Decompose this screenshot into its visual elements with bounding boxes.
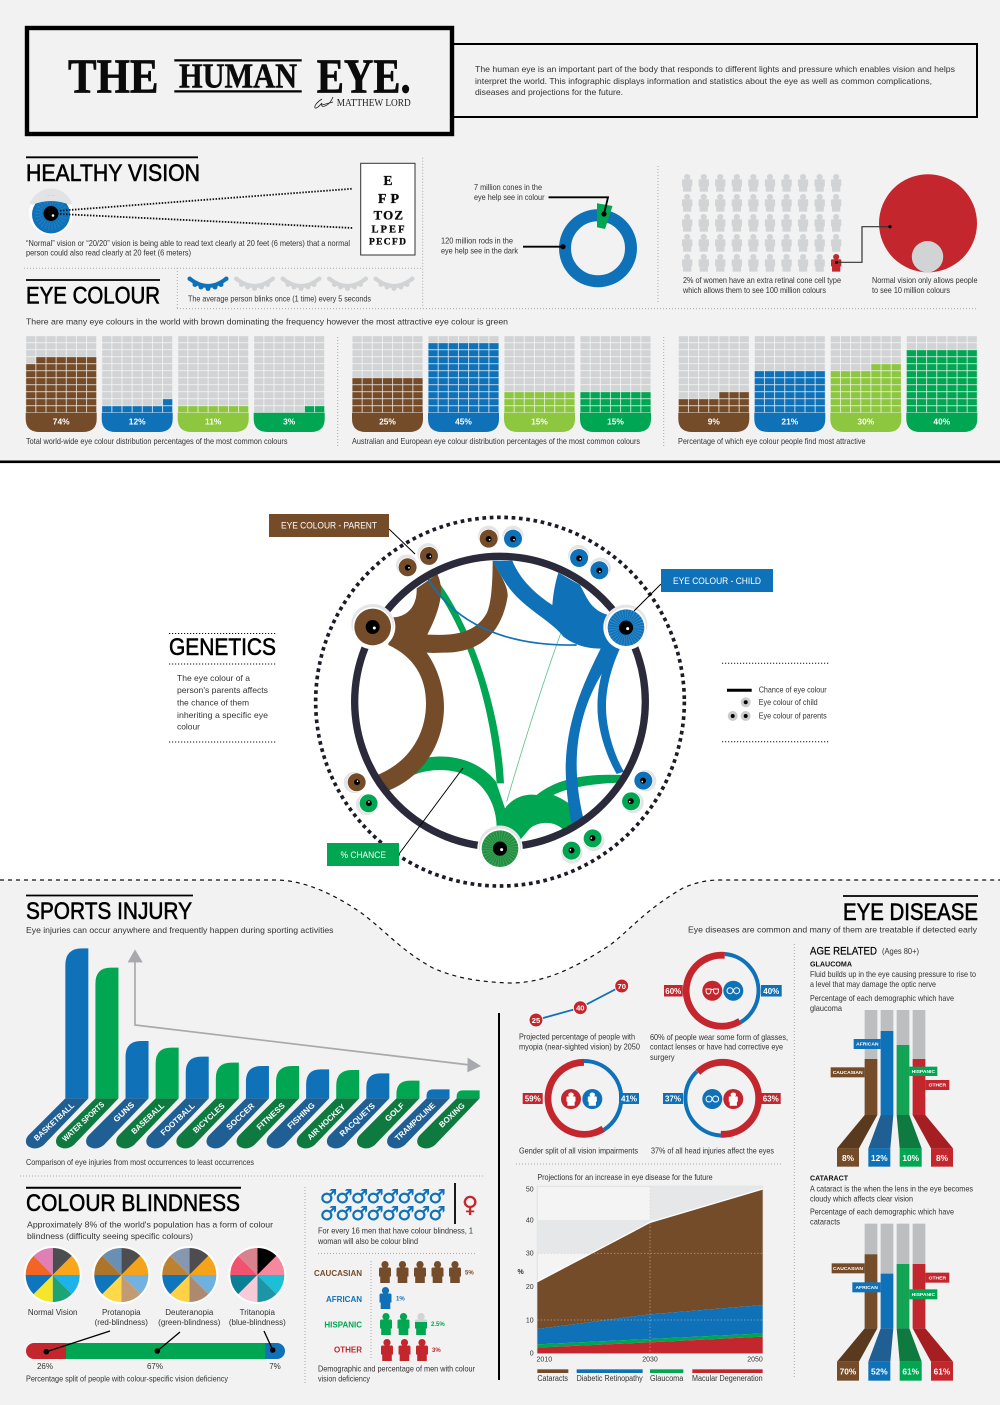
pictogram: demographic: AFRICAN (326, 1295, 362, 1304)
funnel chart: cataract: OTHER (929, 1275, 946, 1281)
waffle group: world-wide distribution: 11% (205, 417, 222, 427)
split bar: deficiency: Percentage split of people with colour-specific vision deficiency (26, 1374, 229, 1384)
bar chart: sports injuries: FOOTBALL (159, 1101, 197, 1137)
chart legend: Macular Degeneration (692, 1374, 763, 1383)
callout: parent: EYE COLOUR - PARENT (281, 520, 377, 530)
ring: corrective eyewear: 60% (665, 987, 681, 996)
ring: gender split (519, 1049, 639, 1156)
ring chart: rods and cones (441, 182, 631, 281)
funnel chart: glaucoma: OTHER (929, 1083, 946, 1089)
axis labels: 20 (526, 1284, 534, 1291)
ring: gender split: 59% (525, 1094, 541, 1104)
legend: Eye colour of parents (759, 710, 827, 720)
text: age related, glaucoma: AGE RELATED (810, 945, 877, 957)
pie labels: Protanopia (102, 1308, 141, 1317)
funnel chart: glaucoma: 10% (902, 1153, 920, 1163)
waffle group: most attractive: 21% (781, 417, 799, 427)
pictogram: demographic: 1% (396, 1296, 405, 1302)
bar chart: sports injuries: TRAMPOLINE (393, 1101, 438, 1143)
area chart: disease projection (518, 1173, 763, 1383)
text: eye colour intro: There are many eye colours in the world with brown dominating the frequency however the most attractive eye colour is green (26, 316, 508, 326)
pie labels: (green-blindness) (158, 1318, 221, 1327)
funnel chart: cataract: AFRICAN (855, 1285, 878, 1291)
axis labels: 2010 (537, 1357, 552, 1364)
bar chart: sports injuries: BOXING (437, 1101, 467, 1129)
split bar: deficiency: 67% (147, 1362, 163, 1371)
callout: child: EYE COLOUR - CHILD (673, 576, 761, 586)
funnel chart: cataract: 61% (902, 1367, 920, 1377)
text: normal vision: “Normal” vision or “20/20” vision is being able to read text clearly at 20 feet (6 meters) that a normal (26, 238, 350, 248)
pictogram: demographic: HISPANIC (324, 1320, 362, 1330)
icons: male to female ratio (320, 1183, 478, 1225)
text: cataract: A cataract is the when the lens in the eye becomes (810, 1184, 973, 1194)
eye chart: TOZ (374, 207, 403, 222)
axis labels: 40 (526, 1217, 534, 1224)
area: cataracts (537, 1189, 763, 1329)
byline: MATTHEW LORD (337, 97, 411, 109)
large eye: parent brown (350, 604, 395, 649)
chart legend (537, 1369, 763, 1383)
text: retinal cone: 2% of women have an extra retinal cone cell type (683, 275, 841, 285)
pie labels: Tritanopia (240, 1308, 275, 1317)
title box (27, 28, 452, 134)
bar chart: sports injuries (26, 948, 481, 1148)
ring: corrective eyewear: surgery (650, 1052, 675, 1062)
waffle group: most attractive: 30% (857, 417, 875, 427)
pictogram: demographic: CAUCASIAN (314, 1269, 362, 1278)
funnel chart: glaucoma: CAUCASIAN (833, 1070, 863, 1076)
bar chart: sports injuries: AIR HOCKEY (306, 1102, 348, 1142)
funnel chart: cataract: HISPANIC (912, 1292, 935, 1298)
large eye: green (477, 826, 523, 871)
text: sports intro: Eye injuries can occur anywhere and frequently happen during sporting activities (26, 925, 334, 935)
line chart: myopia projection (519, 979, 640, 1052)
text: ratio (317, 1226, 473, 1246)
text: age related, glaucoma: Percentage of each demographic which have (810, 993, 954, 1003)
area: diabetic retinopathy (537, 1305, 763, 1344)
ring: corrective eyewear: 60% of people wear some form of glasses, (650, 1032, 788, 1042)
icon: blue eye (29, 189, 73, 235)
legend (722, 663, 830, 742)
waffle group: most attractive: Percentage of which eye colour people find most attractive (678, 436, 866, 446)
funnel chart: cataract: CAUCASIAN (833, 1266, 863, 1272)
callout: chance (327, 768, 463, 866)
axis labels: 0 (530, 1351, 534, 1358)
ring chart: rods and cones: eye help see in colour (474, 192, 545, 202)
eye chart: FP (378, 192, 399, 207)
heading: Genetics: GENETICS (169, 634, 276, 661)
bar chart: sports injuries: WATER SPORTS (61, 1100, 107, 1143)
waffle group: Australian and European: 25% (379, 417, 396, 427)
genetics text panel: The eye colour of a (177, 673, 250, 683)
pie labels: Normal Vision (28, 1308, 78, 1317)
line chart: myopia projection: 70 (617, 982, 626, 991)
bar chart: sports injuries: FITNESS (255, 1101, 287, 1132)
ring: head injuries (651, 1047, 781, 1156)
funnel chart: glaucoma (831, 1010, 953, 1167)
callout: child (634, 569, 773, 611)
blinks row: The average person blinks once (1 time) every 5 seconds (188, 294, 371, 304)
intro box: The human eye is an important part of the body that responds to different lights and pressure which enables vision and helps (475, 64, 955, 74)
heading: Colour Blindness: COLOUR BLINDNESS (26, 1190, 240, 1217)
sight lines (60, 189, 353, 228)
blinks row (188, 276, 414, 304)
pictogram: demographic (314, 1261, 475, 1384)
line chart: myopia projection: myopia (near-sighted vision) by 2050 (519, 1042, 640, 1052)
waffle group: most attractive (678, 336, 977, 446)
waffle group: Australian and European (352, 336, 651, 446)
text: age related, glaucoma: GLAUCOMA (810, 959, 852, 968)
chart legend: Cataracts (537, 1374, 568, 1383)
genetics text panel: inheriting a specific eye (177, 710, 268, 720)
byline (315, 97, 411, 109)
flows: brown (377, 560, 508, 791)
funnel chart: cataract: 61% (934, 1367, 951, 1377)
area: macular degeneration (537, 1337, 763, 1353)
waffle group: Australian and European: 45% (455, 417, 472, 427)
ring: corrective eyewear (650, 942, 788, 1062)
large eye: child blue (603, 605, 649, 650)
bottom section background (0, 880, 1000, 1405)
text: colour blindness intro: blindness (difficulty seeing specific colours) (27, 1231, 193, 1241)
callout: parent (269, 514, 415, 554)
heading: Sports Injury: SPORTS INJURY (26, 898, 192, 925)
text: normal vision: person could also read clearly at 20 feet (6 meters) (26, 248, 191, 258)
pictogram: demographic: 3% (432, 1348, 441, 1354)
funnel chart: glaucoma: HISPANIC (912, 1069, 935, 1075)
text: retinal cone (682, 275, 978, 295)
text: age related, glaucoma: a level that may damage the optic nerve (810, 979, 936, 989)
intro box: interpret the world. This infographic displays information and statistics about the eye as well as common complications, (475, 76, 932, 86)
bottom section dashed edge (0, 880, 1000, 983)
intro box: diseases and projections for the future. (475, 87, 623, 97)
area: glaucoma (537, 1333, 763, 1348)
legend: Chance of eye colour (759, 684, 827, 694)
bar chart: sports injuries: GOLF (383, 1101, 407, 1123)
icons: male to female ratio: ♂♂♂♂♂♂♂♂ (320, 1203, 446, 1225)
ring: corrective eyewear: contact lenses or have had corrective eye (650, 1042, 783, 1052)
text: cataract: Percentage of each demographic which have (810, 1206, 954, 1216)
axis labels: 2030 (642, 1357, 658, 1364)
text: retinal cone: which allows them to see 100 million colours (682, 285, 826, 295)
genetics text panel: person's parents affects (177, 685, 268, 695)
text: age related, glaucoma: Fluid builds up in the eye causing pressure to rise to (810, 969, 976, 979)
text: ratio: For every 16 men that have colour blindness, 1 (318, 1226, 473, 1236)
bar chart: sports injuries: BASEBALL (130, 1101, 166, 1136)
caption: sports: Comparison of eye injuries from most occurrences to least occurrences (26, 1157, 254, 1167)
funnel chart: glaucoma: AFRICAN (856, 1042, 879, 1048)
eye chart: E (384, 174, 392, 189)
text: age related, glaucoma: glaucoma (810, 1003, 842, 1013)
waffle group: Australian and European: 15% (531, 417, 548, 427)
funnel chart: glaucoma: 12% (871, 1153, 888, 1163)
pictogram: demographic: vision deficiency (318, 1374, 371, 1384)
line chart: myopia projection: 40 (576, 1004, 585, 1012)
pie: protanopia (92, 1246, 150, 1304)
area chart: disease projection: Projections for an increase in eye disease for the future (537, 1173, 713, 1182)
text: colour blindness intro (27, 1220, 273, 1241)
pictogram: demographic: 5% (465, 1270, 474, 1276)
intro box (454, 44, 977, 117)
pie: deuteranopia (160, 1246, 218, 1304)
title: The Human Eye: THE (68, 48, 158, 103)
text: cataract: CATARACT (810, 1173, 848, 1182)
waffle group: world-wide distribution: Total world-wide eye colour distribution percentages of the most common colours (26, 436, 288, 446)
ring: corrective eyewear: 40% (763, 987, 779, 996)
waffle group: world-wide distribution: 12% (129, 417, 146, 427)
axis labels (518, 1186, 763, 1364)
bar chart: sports injuries: SOCCER (225, 1101, 256, 1132)
title: The Human Eye: EYE. (317, 48, 411, 103)
text: normal vision (26, 238, 350, 258)
bar chart: sports injuries: GUNS (112, 1100, 137, 1124)
ring chart: rods and cones: 7 million cones in the (474, 182, 542, 192)
dotted outer ring (316, 517, 684, 886)
ring chart: rods and cones: eye help see in the dark (441, 246, 519, 256)
funnel chart: cataract (832, 1224, 953, 1381)
title: The Human Eye (68, 48, 411, 103)
heading: Eye Colour: EYE COLOUR (26, 282, 160, 309)
chart legend: Diabetic Retinopathy (577, 1374, 643, 1383)
funnel chart: cataract: 70% (840, 1367, 857, 1377)
bar chart: sports injuries: RACQUETS (338, 1101, 377, 1138)
ring: gender split: 41% (621, 1094, 637, 1104)
axis labels: 10 (526, 1317, 534, 1324)
text: cataract: cloudy which affects clear vision (810, 1194, 913, 1204)
split bar: deficiency: 26% (37, 1362, 53, 1371)
icons: male to female ratio: ♂♂♂♂♂♂♂♂ (320, 1186, 446, 1208)
text: eye disease intro: Eye diseases are common and many of them are treatable if detected early (688, 924, 978, 934)
genetics text panel (169, 634, 277, 742)
genetics text panel: colour (177, 722, 200, 732)
pie labels (28, 1308, 286, 1327)
circle: colour range comparison (835, 174, 977, 272)
people grid: extra cone women (682, 174, 841, 272)
text: age related, glaucoma (810, 945, 976, 1013)
axis labels: 30 (526, 1251, 534, 1258)
text: retinal cone: to see 10 million colours (872, 285, 950, 295)
dark ring (355, 556, 645, 847)
split bar: deficiency: 7% (269, 1362, 281, 1371)
ring: head injuries: 37% of all head injuries affect the eyes (651, 1146, 774, 1156)
text: cataract (810, 1173, 973, 1226)
pie: normal vision (24, 1246, 82, 1304)
funnel chart: glaucoma: 8% (936, 1153, 949, 1163)
waffle group: world-wide distribution: 3% (283, 417, 296, 427)
waffle group: Australian and European: Australian and European eye colour distribution percentages of the most common colours (352, 436, 640, 446)
chord diagram: genetics (316, 517, 684, 886)
line chart: myopia projection: Projected percentage of people with (519, 1032, 635, 1042)
waffle group: Australian and European: 15% (607, 417, 624, 427)
axis labels: 50 (526, 1186, 534, 1193)
pictogram: demographic: Demographic and percentage of men with colour (318, 1364, 475, 1374)
text: cataract: cataracts (810, 1216, 840, 1226)
split bar: deficiency (26, 1331, 285, 1384)
ring: gender split: Gender split of all vision impairments (519, 1146, 638, 1156)
pictogram: demographic: OTHER (334, 1346, 362, 1354)
text: ratio: woman will also be colour blind (317, 1236, 418, 1246)
pie labels: Deuteranopia (165, 1308, 214, 1317)
text: colour blindness intro: Approximately 8% of the world's population has a form of colour (27, 1220, 273, 1230)
bar chart: sports injuries: BASKETBALL (32, 1101, 76, 1143)
arrow: most to least (128, 949, 481, 1072)
axis labels: 2050 (747, 1357, 763, 1364)
text: retinal cone: Normal vision only allows people (872, 275, 978, 285)
genetics text panel: the chance of them (177, 698, 249, 708)
pie labels: (red-blindness) (95, 1318, 148, 1327)
axis labels: % (518, 1269, 525, 1276)
ring chart: rods and cones: 120 million rods in the (441, 236, 513, 246)
eye chart (361, 163, 415, 255)
chart legend: Glaucoma (650, 1374, 684, 1383)
title: The Human Eye: HUMAN (179, 56, 297, 95)
bar chart: sports injuries: BICYCLES (191, 1101, 227, 1135)
flows: blue (493, 561, 624, 825)
bar chart: sports injuries: FISHING (286, 1101, 317, 1131)
pie: tritanopia (228, 1246, 286, 1304)
line chart: myopia projection: 25 (532, 1016, 541, 1025)
pie labels: (blue-blindness) (229, 1318, 286, 1327)
eye chart: PECFD (369, 237, 406, 247)
eye chart: LPEF (372, 225, 404, 236)
funnel chart: cataract: 52% (871, 1367, 888, 1377)
heading: Healthy Vision: HEALTHY VISION (26, 160, 200, 187)
callout: chance: % CHANCE (340, 850, 386, 860)
flows: green (413, 577, 622, 840)
pictogram: demographic: 2.5% (431, 1322, 445, 1328)
waffle group: world-wide distribution: 74% (53, 417, 70, 427)
text: age related, glaucoma: (Ages 80+) (882, 946, 919, 956)
heading: Eye Disease: EYE DISEASE (843, 899, 978, 926)
legend: Eye colour of child (759, 697, 818, 707)
ring: head injuries: 37% (665, 1094, 681, 1104)
funnel chart: glaucoma: 8% (842, 1153, 855, 1163)
waffle group: most attractive: 9% (708, 417, 720, 427)
waffle group: world-wide distribution (26, 336, 325, 446)
icons: male to female ratio: ♀ (462, 1193, 478, 1218)
waffle group: most attractive: 40% (933, 417, 951, 427)
ring: head injuries: 63% (763, 1094, 779, 1104)
small eyes: parents (343, 526, 657, 865)
